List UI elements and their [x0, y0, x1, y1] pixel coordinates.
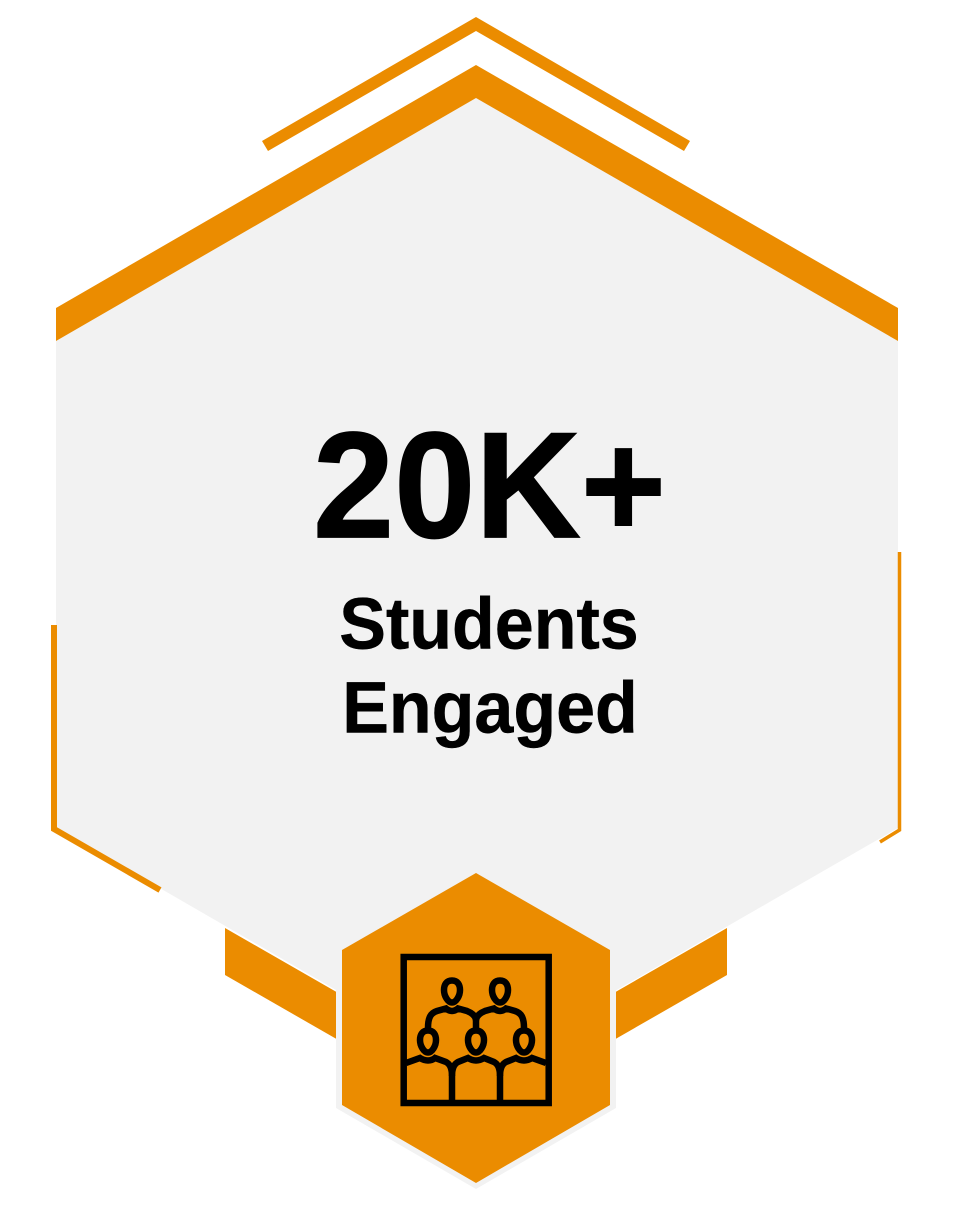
statistic: 20K+: 20K+ [313, 401, 666, 569]
top chevron accent [262, 17, 690, 151]
left outline accent [54, 625, 160, 890]
main hexagon panel [56, 98, 898, 1071]
label: Students Engaged [339, 583, 639, 748]
icon hexagon [342, 873, 610, 1183]
label: Students Engaged: Students [339, 583, 639, 664]
icon: audience in frame [404, 957, 549, 1103]
right outline accent [880, 552, 900, 842]
lower side ribbons [225, 928, 727, 1041]
icon hexagon outline [336, 866, 616, 1189]
label: Students Engaged: Engaged [342, 667, 638, 748]
main hexagon orange top band [56, 65, 898, 345]
